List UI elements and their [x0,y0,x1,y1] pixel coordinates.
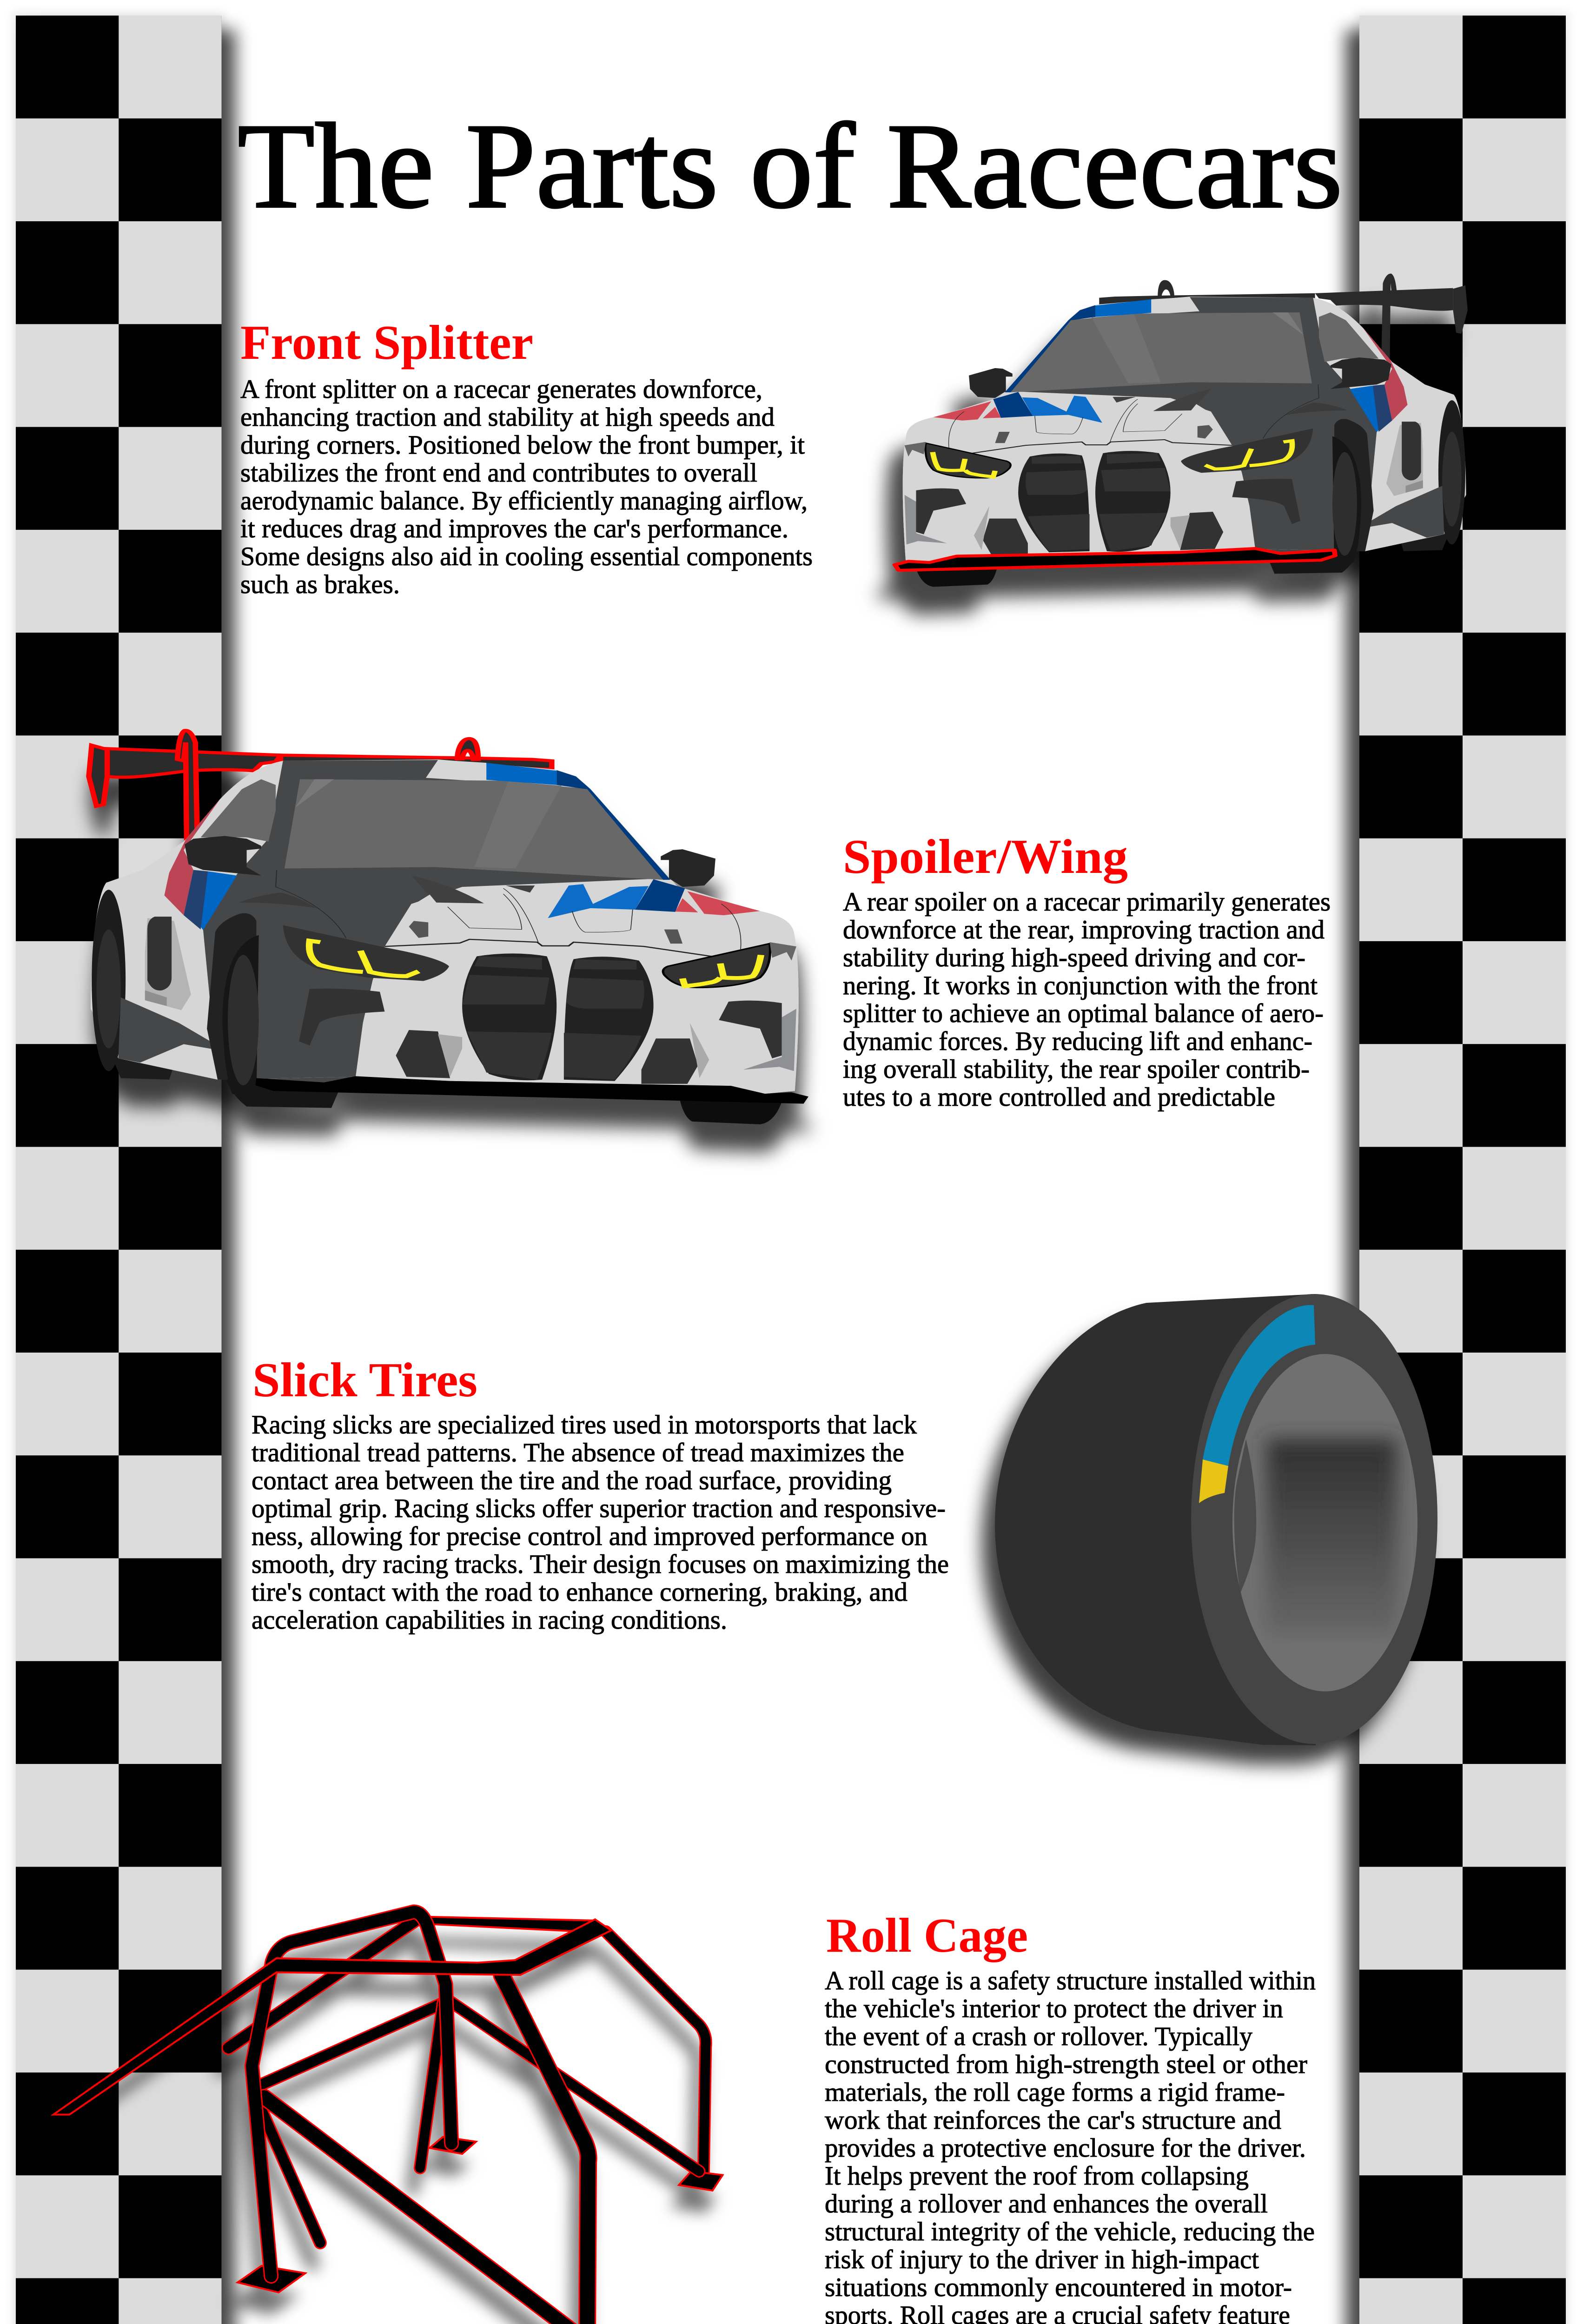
illustration: race car mirrored with red-outlined rear wing [89,731,808,1124]
illustration: race car front view with red-outlined splitter [895,274,1468,587]
text block: front splitter description [240,375,813,599]
text block: spoiler description: stability during high-speed driving and cor- [843,943,1305,972]
illustration: slick racing tire [995,1294,1437,1745]
text block: front splitter description: stabilizes the front end and contributes to overall [240,458,757,488]
heading: front splitter: Front Splitter [240,315,533,370]
text block: front splitter description: aerodynamic balance. By efficiently managing airflow, [240,486,808,515]
text block: front splitter description: such as brakes. [240,570,400,599]
text block: front splitter description: it reduces drag and improves the car's performance. [240,514,788,543]
text block: slick tires description: ness, allowing for precise control and improved performance on [252,1522,927,1551]
text block: spoiler description: ing overall stability, the rear spoiler contrib- [843,1055,1310,1084]
text block: roll cage description: It helps prevent the roof from collapsing [825,2161,1249,2191]
text block: roll cage description: risk of injury to the driver in high-impact [825,2245,1259,2274]
text block: slick tires description: acceleration capabilities in racing conditions. [252,1605,727,1635]
text block: roll cage description: situations commonly encountered in motor- [825,2273,1292,2302]
title: The Parts of Racecars [238,99,1343,233]
text block: slick tires description: traditional tread patterns. The absence of tread maximizes the [252,1438,904,1467]
heading: spoiler/wing: Spoiler/Wing [843,829,1128,884]
text block: roll cage description: provides a protective enclosure for the driver. [825,2133,1306,2163]
text block: roll cage description: A roll cage is a safety structure installed within [825,1966,1316,1995]
panel: left checkered strip [12,12,236,2324]
text block: spoiler description: splitter to achieve an optimal balance of aero- [843,999,1324,1028]
text block: slick tires description: tire's contact with the road to enhance cornering, braking, and [252,1578,907,1607]
heading: slick tires: Slick Tires [252,1353,477,1407]
text block: roll cage description: the vehicle's interior to protect the driver in [825,1994,1283,2023]
text block: spoiler description: nering. It works in conjunction with the front [843,971,1318,1000]
text block: slick tires description [252,1410,949,1635]
text block: slick tires description: optimal grip. Racing slicks offer superior traction and responsive- [252,1494,946,1523]
section: spoiler/wing [843,829,1331,1112]
text block: spoiler description [843,887,1331,1112]
text block: front splitter description: A front splitter on a racecar generates downforce, [240,375,762,404]
text block: slick tires description: Racing slicks are specialized tires used in motorsports that lack [252,1410,917,1439]
text block: roll cage description: work that reinforces the car's structure and [825,2106,1281,2135]
text block: spoiler description: dynamic forces. By reducing lift and enhanc- [843,1027,1312,1056]
text block: front splitter description: enhancing traction and stability at high speeds and [240,403,775,432]
text block: roll cage description: during a rollover and enhances the overall [825,2189,1268,2218]
text block: roll cage description: constructed from high-strength steel or other [825,2050,1307,2079]
text block: spoiler description: A rear spoiler on a racecar primarily generates [843,887,1331,917]
text block: roll cage description: structural integrity of the vehicle, reducing the [825,2217,1315,2246]
text block: slick tires description: smooth, dry racing tracks. Their design focuses on maximizing the [252,1550,949,1579]
text block: roll cage description: the event of a crash or rollover. Typically [825,2022,1252,2051]
section: slick tires [252,1353,949,1635]
text block: spoiler description: utes to a more controlled and predictable [843,1083,1275,1112]
heading: roll cage: Roll Cage [826,1908,1028,1962]
section: front splitter [240,315,813,599]
section: roll cage [825,1908,1316,2324]
text block: roll cage description: materials, the roll cage forms a rigid frame- [825,2078,1285,2107]
text block: slick tires description: contact area between the tire and the road surface, providing [252,1466,892,1495]
illustration: roll cage [53,1912,722,2324]
text block: front splitter description: Some designs also aid in cooling essential components [240,542,813,571]
text block: roll cage description [825,1966,1316,2324]
text block: spoiler description: downforce at the rear, improving traction and [843,915,1325,944]
text block: front splitter description: during corners. Positioned below the front bumper, it [240,430,805,460]
panel: right checkered strip [1345,12,1570,2324]
